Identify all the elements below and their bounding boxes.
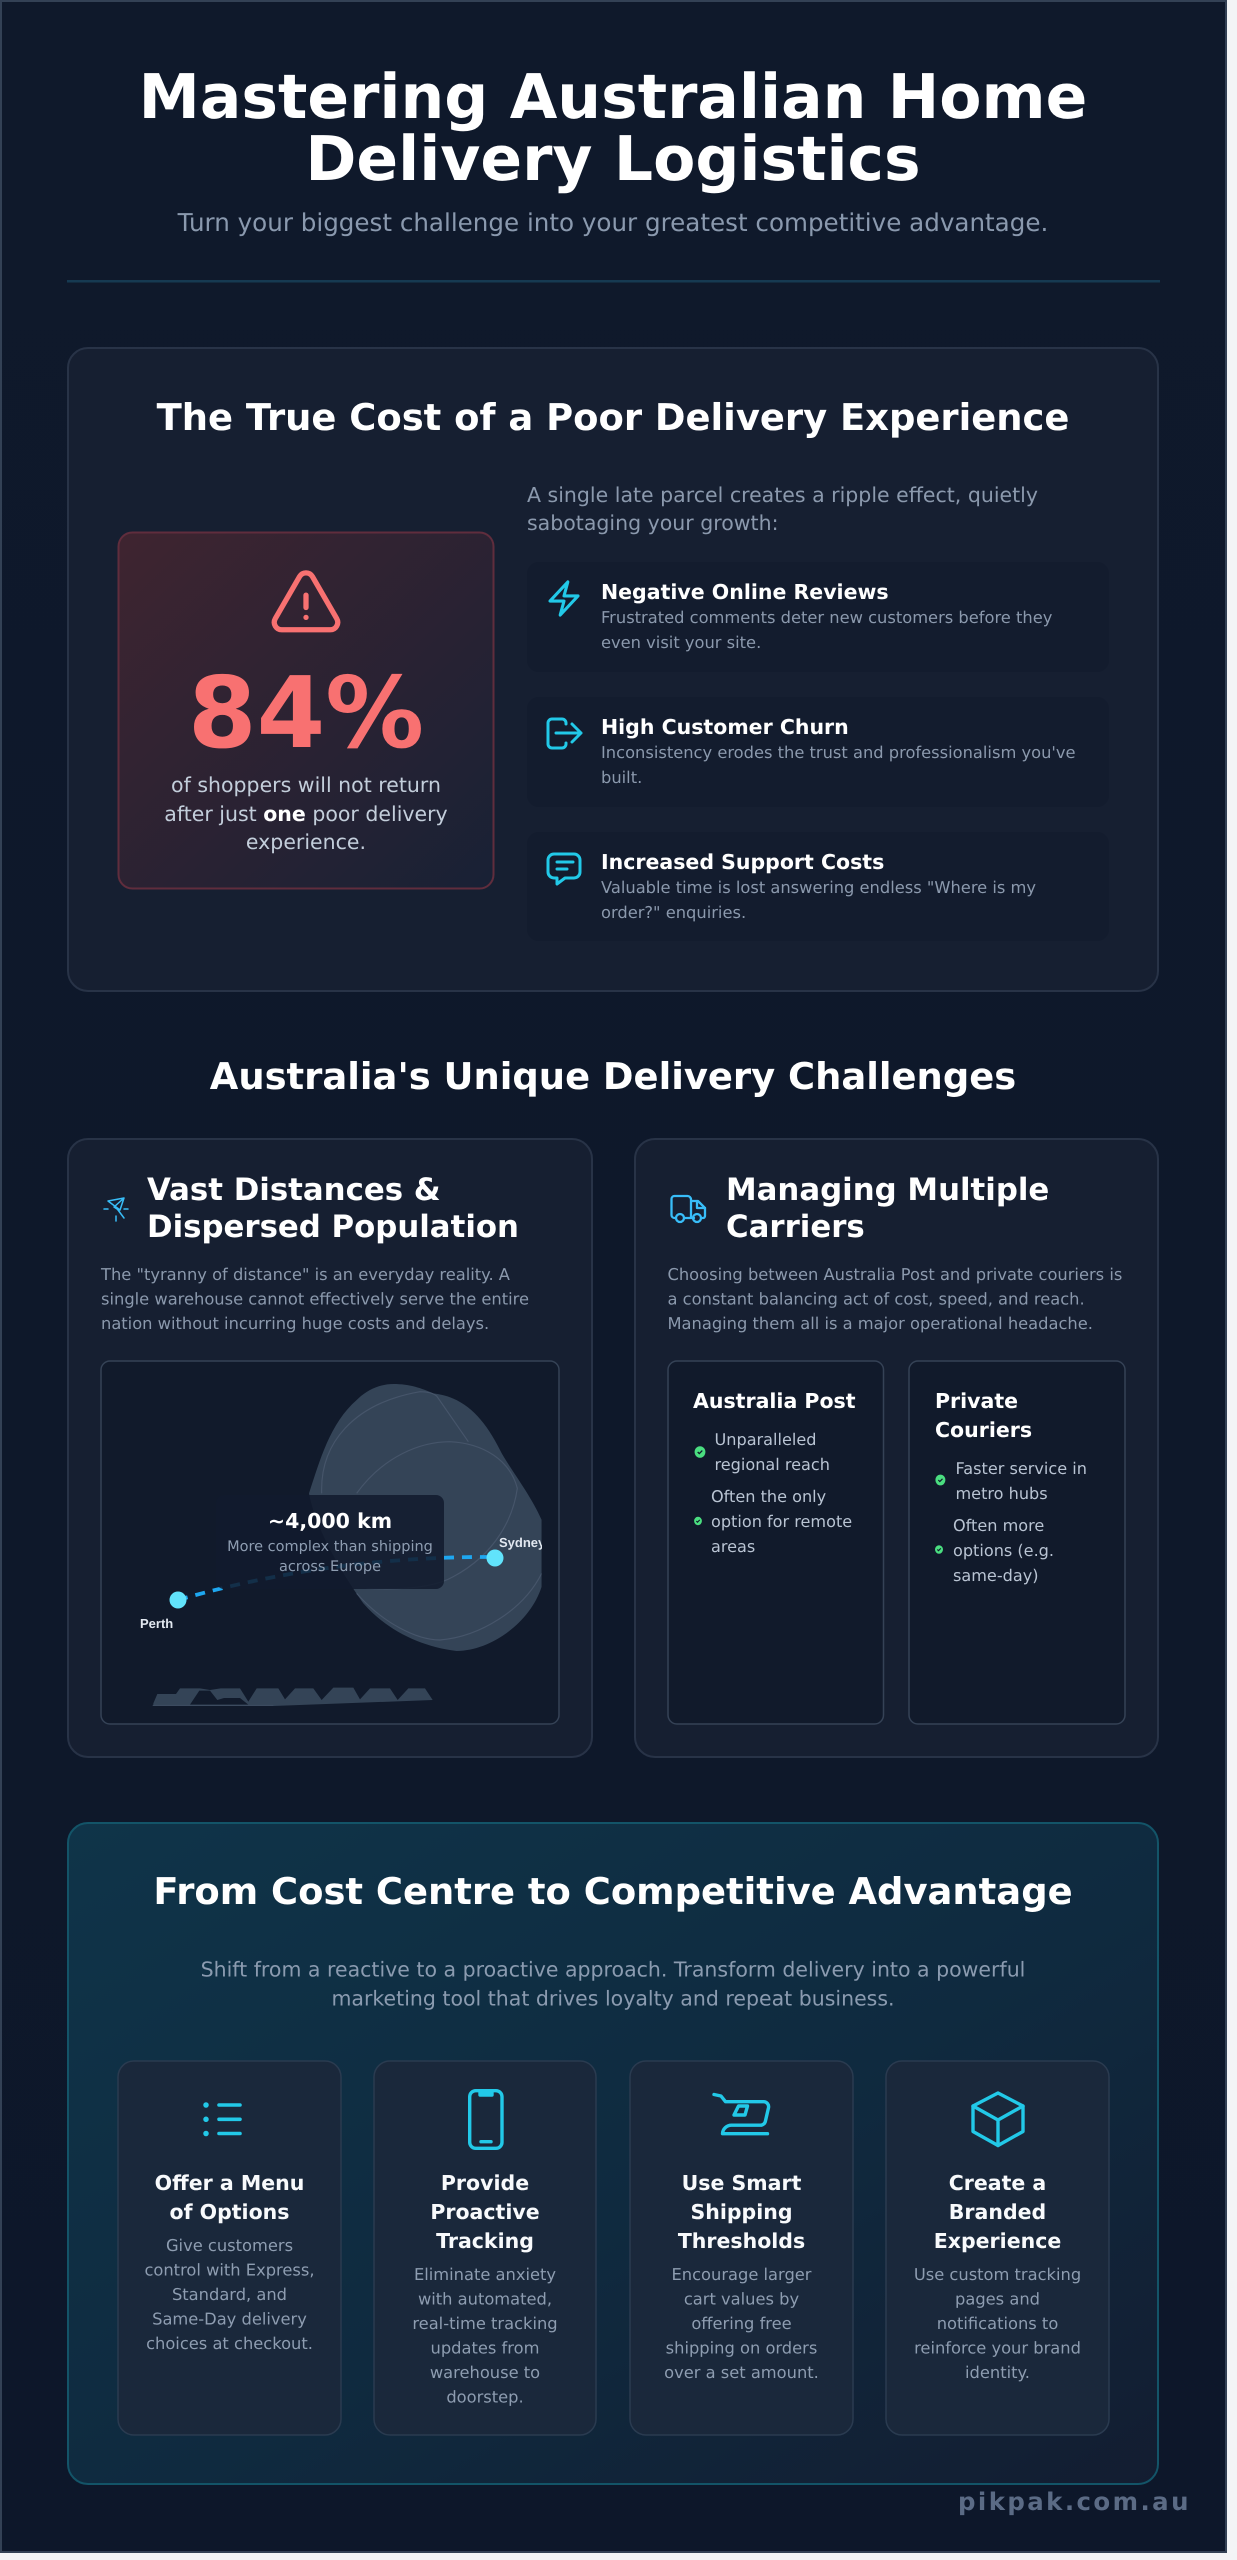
- card: shipping thresholds: [630, 2061, 853, 2435]
- city: Perth: [140, 1592, 186, 1631]
- callout: distance: More complex than shipping: [227, 1539, 433, 1555]
- card text: [914, 2265, 1081, 2382]
- card: branded experience: [886, 2061, 1109, 2435]
- city: Perth: Perth: [140, 1616, 173, 1631]
- item text: [601, 743, 1076, 787]
- card heading: Dispersed Population: [147, 1209, 519, 1245]
- card text: identity.: [965, 2363, 1030, 2382]
- bullet: metro hubs: Faster service in: [956, 1459, 1087, 1478]
- card title: Branded: [949, 2200, 1046, 2224]
- card text: Choosing between Australia Post and private couriers is: [668, 1265, 1122, 1284]
- item: customer churn: [527, 697, 1109, 807]
- map: australia shapes: [153, 1384, 542, 1706]
- item text: [601, 878, 1036, 922]
- icon: paper plane: [104, 1198, 128, 1221]
- intro text: marketing tool that drives loyalty and repeat business.: [331, 1986, 895, 2010]
- bullet: same-day: options (e.g.: [953, 1541, 1054, 1560]
- icon: cart: [714, 2094, 769, 2134]
- item title: Increased Support Costs: [601, 850, 884, 874]
- footer: website: pikpak.com.au: [958, 2487, 1191, 2516]
- heading: advantage: From Cost Centre to Competitive Advantage: [153, 1870, 1073, 1913]
- card text: choices at checkout.: [146, 2334, 313, 2353]
- bullet: same-day: Often more: [953, 1516, 1044, 1535]
- item text: Frustrated comments deter new customers before they: [601, 608, 1053, 627]
- card text: nation without incurring huge costs and delays.: [101, 1314, 489, 1333]
- bullet: regional reach: Unparalleled: [714, 1430, 816, 1449]
- card text: real-time tracking: [412, 2314, 558, 2333]
- title: Delivery Logistics: [305, 123, 921, 195]
- card title: Create a: [949, 2171, 1046, 2195]
- card text: Managing them all is a major operational headache.: [668, 1314, 1093, 1333]
- stat caption: experience.: [246, 830, 366, 854]
- bullet: same-day: [935, 1516, 1054, 1585]
- item: support costs: [527, 832, 1109, 941]
- card text: reinforce your brand: [914, 2338, 1081, 2358]
- intro text: [527, 483, 1038, 535]
- bullet: remote areas: Often the only: [711, 1487, 827, 1506]
- title: [139, 61, 1087, 195]
- bullet: remote areas: areas: [711, 1537, 755, 1556]
- card title: Use Smart: [682, 2171, 802, 2195]
- card text: Eliminate anxiety: [414, 2265, 556, 2284]
- card title: Provide: [441, 2171, 529, 2195]
- card title: Experience: [934, 2229, 1061, 2253]
- card heading: Carriers: [726, 1209, 865, 1245]
- card text: with automated,: [418, 2290, 552, 2308]
- map: coastline strip: [153, 1688, 433, 1706]
- card text: control with Express,: [144, 2260, 315, 2280]
- card text: notifications to: [937, 2314, 1058, 2333]
- item title: High Customer Churn: [601, 715, 849, 739]
- card text: Same-Day delivery: [152, 2310, 307, 2328]
- card text: cart values by: [684, 2290, 800, 2308]
- stat card: 84%: [118, 532, 494, 888]
- box: Australia Post: [668, 1361, 884, 1724]
- intro text: [201, 1958, 1025, 2010]
- stat caption: [164, 773, 448, 854]
- item text: [601, 608, 1053, 652]
- card text: over a set amount.: [664, 2363, 819, 2382]
- icon: cube: [973, 2093, 1023, 2146]
- card text: updates from: [431, 2338, 539, 2358]
- card: menu of options: [118, 2061, 341, 2435]
- stat number: 84%: [188, 656, 424, 771]
- card text: doorstep.: [446, 2388, 524, 2406]
- card title: [155, 2171, 304, 2224]
- route dashed line: [178, 1557, 495, 1600]
- map: [101, 1361, 559, 1724]
- card text: shipping on orders: [666, 2338, 817, 2358]
- card title: [934, 2171, 1061, 2253]
- card title: [678, 2171, 805, 2253]
- card title: of Options: [170, 2200, 289, 2224]
- icon: exit arrow: [548, 719, 581, 748]
- card text: offering free: [691, 2314, 792, 2333]
- bullet: regional reach: regional reach: [714, 1455, 830, 1474]
- item text: Valuable time is lost answering endless "Where is my: [601, 878, 1036, 897]
- intro text: sabotaging your growth:: [527, 511, 778, 535]
- stat caption: of shoppers will not return: [171, 773, 441, 797]
- card heading: [147, 1172, 519, 1245]
- icon: warning triangle: [274, 573, 338, 630]
- card text: The "tyranny of distance" is an everyday reality. A: [100, 1265, 510, 1284]
- card title: Thresholds: [678, 2229, 805, 2253]
- icon: list: [206, 2105, 240, 2134]
- heading: challenges: Australia's Unique Delivery Challenges: [210, 1055, 1016, 1098]
- bullet: metro hubs: metro hubs: [956, 1484, 1048, 1503]
- card text: [664, 2265, 819, 2382]
- panel: vast distances: [68, 1139, 592, 1757]
- bullet: regional reach: [695, 1430, 830, 1474]
- card text: Give customers: [166, 2236, 293, 2255]
- callout: distance: ~4,000 km: [268, 1509, 392, 1533]
- item title: Negative Online Reviews: [601, 580, 889, 604]
- panel: multiple carriers: [635, 1139, 1158, 1757]
- card text: Standard, and: [172, 2285, 287, 2304]
- card text: [668, 1265, 1122, 1333]
- card title: Tracking: [436, 2229, 534, 2253]
- card text: warehouse to: [430, 2363, 540, 2382]
- icon: bolt: [550, 582, 578, 615]
- item text: built.: [601, 768, 642, 787]
- bullet: metro hubs: [935, 1459, 1087, 1503]
- card text: [100, 1265, 529, 1333]
- callout: distance: across Europe: [279, 1559, 381, 1575]
- card title: Offer a Menu: [155, 2171, 304, 2195]
- card title: Proactive: [430, 2200, 540, 2224]
- header: [67, 61, 1160, 282]
- bullet: same-day: same-day): [953, 1566, 1039, 1585]
- item text: Inconsistency erodes the trust and professionalism you've: [601, 743, 1076, 762]
- bullet: remote areas: [694, 1487, 852, 1556]
- box: Private Couriers: Private: [935, 1389, 1018, 1413]
- intro text: Shift from a reactive to a proactive approach. Transform delivery into a powerful: [201, 1958, 1025, 1982]
- callout: distance: [216, 1495, 444, 1589]
- card text: pages and: [955, 2290, 1040, 2308]
- card heading: Managing Multiple: [726, 1172, 1049, 1208]
- icon: chat bubble: [548, 854, 580, 884]
- item text: even visit your site.: [601, 633, 761, 652]
- card text: single warehouse cannot effectively serve the entire: [101, 1290, 529, 1308]
- card text: [144, 2236, 315, 2353]
- city: Sydney: [486, 1535, 546, 1566]
- subtitle: Turn your biggest challenge into your greatest competitive advantage.: [177, 208, 1048, 237]
- card text: Use custom tracking: [914, 2265, 1081, 2284]
- card heading: [726, 1172, 1049, 1245]
- box: Australia Post: Australia Post: [693, 1389, 856, 1413]
- card text: Encourage larger: [672, 2265, 812, 2284]
- card text: a constant balancing act of cost, speed, and reach.: [668, 1290, 1085, 1308]
- panel: true cost: [68, 348, 1158, 991]
- intro text: A single late parcel creates a ripple effect, quietly: [527, 483, 1038, 507]
- box: Private Couriers: [909, 1361, 1125, 1724]
- title: Mastering Australian Home: [139, 61, 1087, 133]
- card text: [412, 2265, 558, 2406]
- icon: truck: [672, 1196, 705, 1222]
- card title: [430, 2171, 540, 2253]
- card title: Shipping: [690, 2200, 793, 2224]
- icon: smartphone: [470, 2091, 502, 2148]
- item text: order?" enquiries.: [601, 903, 746, 922]
- panel: competitive advantage: [68, 1823, 1158, 2484]
- item: negative reviews: [527, 562, 1109, 672]
- box: Private Couriers: Couriers: [935, 1418, 1032, 1442]
- heading: true cost: The True Cost of a Poor Delivery Experience: [157, 396, 1069, 439]
- stat caption: after just one poor delivery: [164, 802, 448, 826]
- card heading: Vast Distances &: [147, 1172, 441, 1208]
- card: proactive tracking: [374, 2061, 596, 2435]
- city: Sydney: Sydney: [499, 1535, 546, 1550]
- bullet: remote areas: option for remote: [711, 1512, 852, 1531]
